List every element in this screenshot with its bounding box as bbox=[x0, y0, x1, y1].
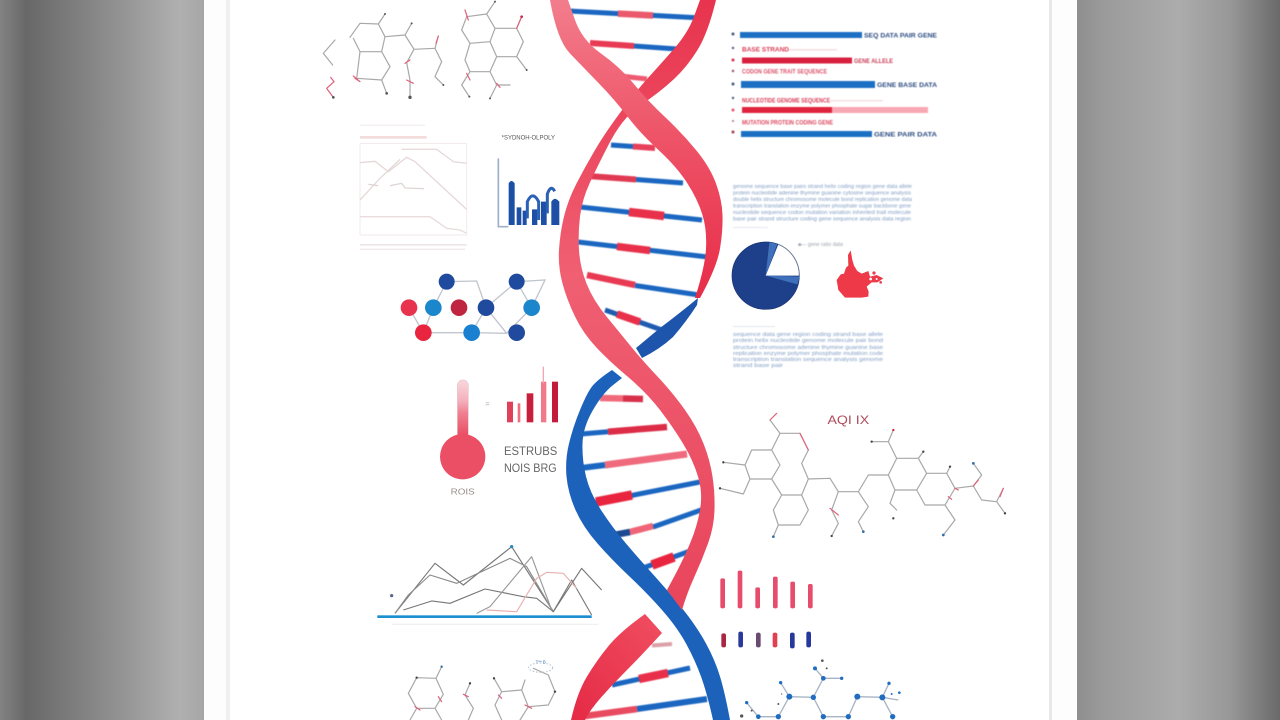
text block: lower paragraph: replication enzyme polymer phosphate mutation code bbox=[733, 351, 883, 357]
molecule diagram: bottom left bbox=[408, 660, 556, 720]
red strand: front bbox=[550, 0, 723, 298]
molecule diagram: top left bbox=[323, 1, 528, 99]
molecule network: coloured nodes bbox=[401, 274, 545, 341]
text block: upper paragraph: double helix structure chromosome molecule bond replication genome data bbox=[733, 197, 913, 203]
molecule diagram: blue bottom right bbox=[740, 659, 901, 719]
text block: lower paragraph: transcription translation sequence analysis genome bbox=[733, 357, 883, 363]
text block: label beside bars: ESTRUBS bbox=[504, 444, 557, 458]
row: blue bar 1 bbox=[740, 32, 938, 40]
row: red caption 1: BASE STRAND bbox=[742, 46, 789, 54]
molecule diagram: bottom left: T** B bbox=[536, 660, 546, 665]
pie chart bbox=[732, 242, 799, 309]
text block: upper paragraph: transcription translation enzyme polymer phosphate sugar backbone gene bbox=[733, 204, 911, 210]
blue strand: upper segment bbox=[636, 298, 698, 358]
text block: lower paragraph: sequence data gene region coding strand base allele bbox=[733, 332, 883, 338]
text block: upper paragraph: nucleotide sequence codon mutation variation inherited trait molecule bbox=[733, 210, 911, 216]
line chart: pale panel bbox=[360, 125, 467, 250]
text block: lower paragraph: protein helix nucleotide genome molecule pair bond bbox=[733, 338, 883, 344]
row: blue bar 3: GENE PAIR DATA bbox=[874, 132, 937, 138]
bar chart: blue arches bbox=[498, 134, 559, 227]
poster sheet bbox=[204, 0, 1077, 720]
row: red bar 2 bbox=[742, 107, 928, 113]
DNA double helix bbox=[550, 0, 730, 720]
blue strand bbox=[566, 370, 730, 720]
row: blue bar 1: SEQ DATA PAIR GENE bbox=[864, 32, 938, 40]
text block: label beside bars: NOIS BRG bbox=[504, 461, 557, 475]
line chart: overlapping peaks bbox=[377, 545, 602, 625]
text block: upper paragraph: base pair strand structure coding gene sequence analysis data region bbox=[733, 216, 911, 222]
chart title: *SYDNOH-OLPOLY bbox=[502, 134, 555, 141]
text block: label beside bars bbox=[504, 444, 557, 475]
row: red bar 1: GENE ALLELE bbox=[854, 58, 894, 65]
red strand: rear bbox=[559, 0, 716, 610]
small red bar chart: = bbox=[485, 400, 489, 409]
row: red bar 1 bbox=[742, 58, 894, 65]
row: blue bar 2 bbox=[741, 81, 937, 89]
paired bars: bottom right bbox=[720, 571, 813, 648]
row: red caption 3: NUCLEOTIDE GENOME SEQUENCE bbox=[742, 98, 831, 104]
thermometer icon bbox=[440, 380, 485, 496]
text block: upper paragraph: genome sequence base pairs strand helix coding region gene data allele bbox=[733, 184, 912, 190]
row: red caption 1 bbox=[742, 46, 837, 54]
small red bar chart bbox=[485, 367, 558, 422]
text block: upper paragraph: protein nucleotide adenine thymine guanine cytosine sequence analysis bbox=[733, 190, 911, 196]
row: blue bar 2: GENE BASE DATA bbox=[877, 82, 937, 89]
row: red caption 4: MUTATION PROTEIN CODING GENE bbox=[742, 120, 834, 126]
helix rungs bbox=[569, 11, 708, 716]
row: red caption 2: CODON GENE TRAIT SEQUENCE bbox=[742, 68, 828, 76]
text block: upper paragraph bbox=[733, 184, 913, 228]
pie caption: ■— gene ratio data bbox=[798, 242, 843, 248]
lower red strand bbox=[571, 614, 662, 720]
text block: lower paragraph: structure chromosome adenine thymine guanine base bbox=[733, 345, 883, 351]
molecule diagram: right bbox=[719, 413, 1006, 538]
row: blue bar 3 bbox=[741, 131, 937, 138]
text block: lower paragraph: strand base pair bbox=[733, 363, 783, 369]
text block: lower paragraph bbox=[733, 326, 883, 369]
bullet list with bars bbox=[732, 32, 938, 138]
bullets bbox=[732, 32, 734, 134]
red splat icon bbox=[837, 250, 883, 298]
thermometer label: ROIS bbox=[451, 487, 475, 496]
molecule label: AQI IX bbox=[827, 413, 869, 427]
